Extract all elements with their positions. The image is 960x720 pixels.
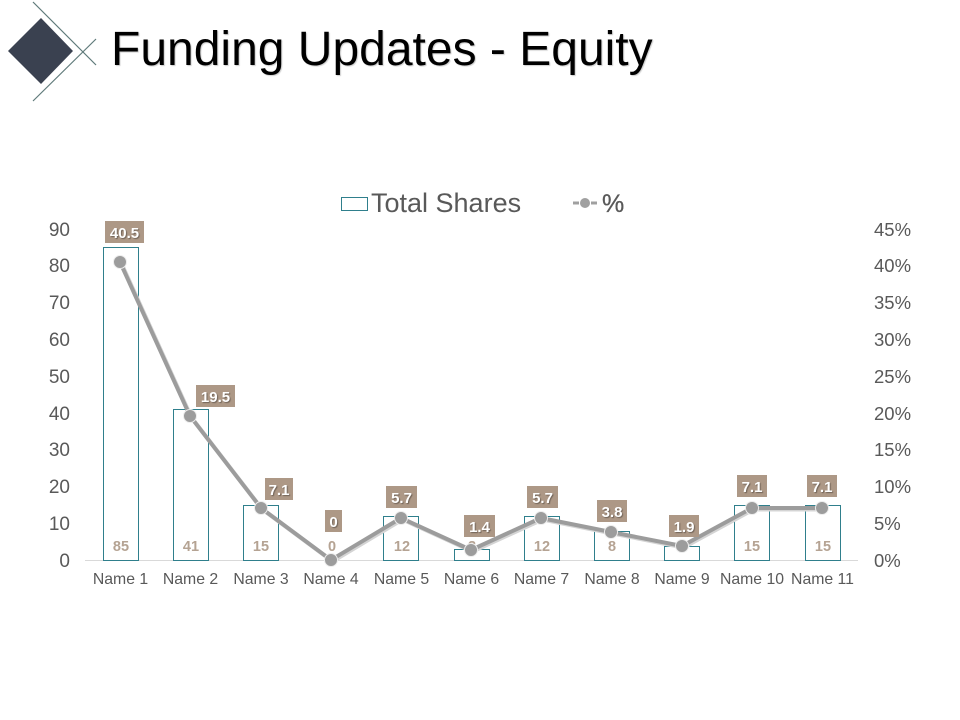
- bar value labels: 4: [678, 539, 686, 555]
- category labels: [93, 571, 854, 588]
- chart: total shares and percent: [49, 219, 911, 588]
- percent callouts: [105, 221, 837, 537]
- left axis labels: 20: [49, 477, 70, 498]
- category labels: Name 3: [233, 571, 289, 588]
- category labels: Name 5: [374, 571, 429, 588]
- category labels: Name 7: [514, 571, 569, 588]
- chart: total shares and percent: 3.8: [602, 504, 622, 521]
- chart: total shares and percent: 5.7: [532, 490, 553, 507]
- category labels: Name 6: [444, 571, 499, 588]
- bar value labels: 15: [815, 539, 831, 555]
- right axis labels: 10%: [874, 476, 911, 497]
- chart: total shares and percent: 0: [329, 514, 338, 531]
- right axis labels: [874, 219, 911, 571]
- right axis labels: 0%: [874, 550, 901, 571]
- right axis labels: 35%: [874, 292, 911, 313]
- category labels: Name 8: [584, 571, 640, 588]
- left axis labels: 50: [49, 367, 70, 388]
- category labels: Name 1: [93, 571, 148, 588]
- chart: total shares and percent: 19.5: [201, 389, 230, 406]
- category labels: Name 10: [720, 571, 784, 588]
- left axis labels: 0: [59, 551, 70, 572]
- right axis labels: 15%: [874, 439, 911, 460]
- right axis labels: 20%: [874, 403, 911, 424]
- bar value labels: 41: [183, 539, 199, 555]
- right axis labels: 5%: [874, 513, 901, 534]
- chart: total shares and percent: 40.5: [110, 225, 139, 242]
- bars: [104, 248, 840, 560]
- bar value labels: 0: [328, 539, 336, 555]
- bar value labels: [113, 539, 831, 555]
- baseline: [85, 560, 858, 562]
- bar value labels: 15: [253, 539, 269, 555]
- title: Funding Updates - Equity: [111, 23, 653, 76]
- bar value labels: 3: [468, 539, 476, 555]
- bar value labels: 8: [608, 539, 616, 555]
- chart: total shares and percent: 7.1: [269, 482, 289, 499]
- bar value labels: 85: [113, 539, 129, 555]
- left axis labels: 40: [49, 404, 70, 425]
- bar value labels: 12: [394, 539, 410, 555]
- bar value labels: 12: [534, 539, 550, 555]
- category labels: Name 4: [303, 571, 359, 588]
- legend: Total Shares: [371, 188, 521, 218]
- right axis labels: 25%: [874, 366, 911, 387]
- chart: total shares and percent: 7.1: [742, 479, 762, 496]
- chart: total shares and percent: 5.7: [391, 490, 412, 507]
- left axis labels: 70: [49, 293, 70, 314]
- left axis labels: 90: [49, 220, 70, 241]
- category labels: Name 9: [654, 571, 710, 588]
- right axis labels: 30%: [874, 329, 911, 350]
- icon: diamond logo: [8, 2, 96, 101]
- left axis labels: 80: [49, 256, 70, 277]
- chart: total shares and percent: 1.9: [674, 519, 694, 536]
- category labels: Name 2: [163, 571, 218, 588]
- legend: %: [602, 190, 624, 218]
- chart: total shares and percent: 1.4: [469, 519, 491, 536]
- line series: [114, 256, 828, 566]
- left axis labels: 60: [49, 330, 70, 351]
- chart: total shares and percent: 7.1: [812, 479, 832, 496]
- left axis labels: [49, 220, 70, 572]
- right axis labels: 45%: [874, 219, 911, 240]
- left axis labels: 30: [49, 440, 70, 461]
- category labels: Name 11: [791, 571, 854, 588]
- left axis labels: 10: [49, 514, 70, 535]
- right axis labels: 40%: [874, 255, 911, 276]
- legend: [342, 188, 624, 218]
- bar value labels: 15: [744, 539, 760, 555]
